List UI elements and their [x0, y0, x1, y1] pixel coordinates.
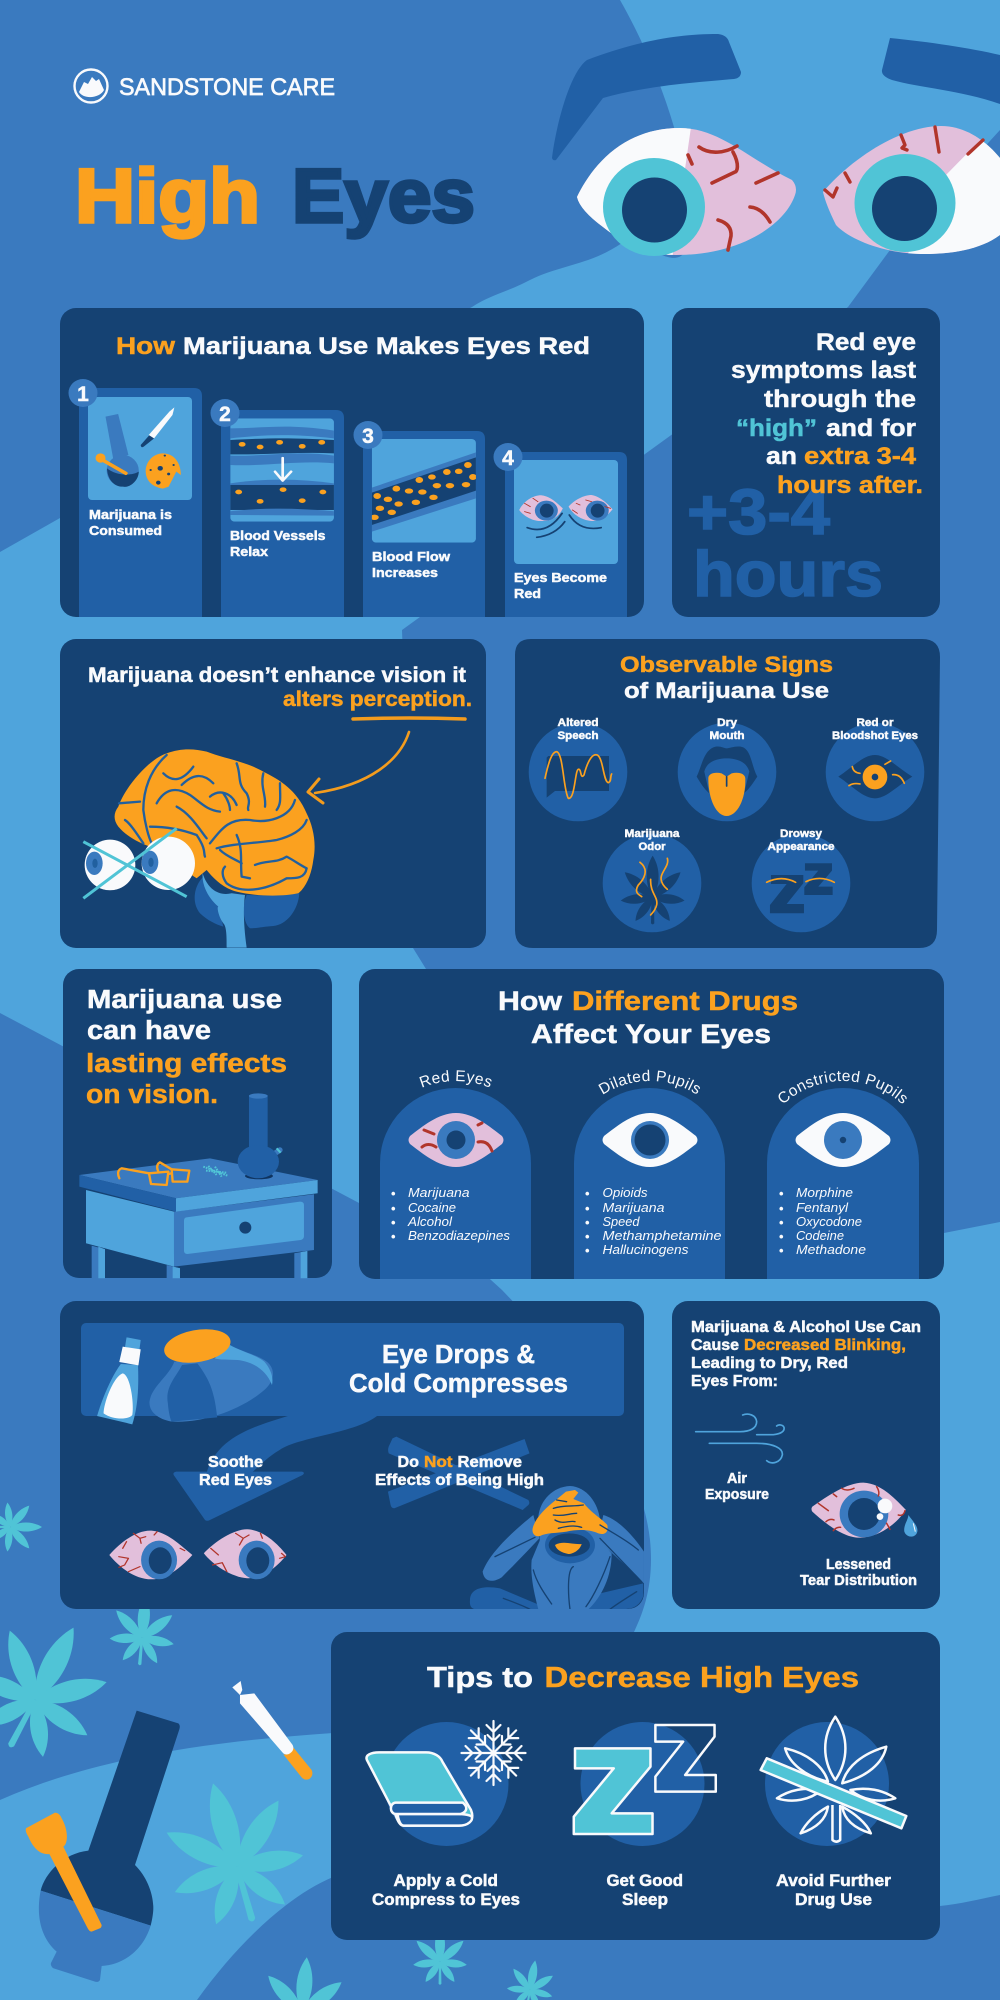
sign: bloodshot eyes: Bloodshot Eyes	[832, 730, 918, 742]
icon: X shape	[388, 1437, 530, 1510]
heading: Cold Compresses	[349, 1370, 568, 1398]
heading: Observable Signs	[620, 652, 833, 677]
text block: on vision.	[86, 1081, 218, 1109]
label: soothe	[199, 1454, 272, 1489]
icon: left eyebrow	[552, 34, 741, 160]
watermark: +3-4 hours: +3-4	[687, 476, 830, 548]
icon: left red eye	[577, 128, 796, 256]
heading	[349, 1341, 568, 1398]
text block: an	[766, 443, 797, 470]
panel: how different drugs affect your eyes	[359, 969, 944, 1279]
column: red eyes: •	[391, 1215, 396, 1230]
heading: Decrease High Eyes	[544, 1662, 859, 1694]
text block: hours after.	[777, 472, 923, 499]
panel: how marijuana use makes eyes red	[60, 308, 644, 617]
step 3 card: Blood Flow	[372, 549, 451, 564]
heading: Marijuana doesn’t enhance vision it	[88, 664, 466, 687]
icon: eye drops bottle	[97, 1337, 141, 1424]
text block: extra 3-4	[804, 443, 916, 470]
label: soothe: Soothe	[208, 1454, 263, 1471]
heading: Marijuana Use Makes Eyes Red	[183, 333, 590, 360]
panel: alters perception	[60, 639, 486, 948]
column: dilated pupils: •	[585, 1201, 590, 1216]
icon: constricted eye	[796, 1113, 890, 1167]
panel: eye drops and cold compresses	[60, 1301, 644, 1609]
text block	[731, 329, 923, 499]
column: dilated pupils: •	[585, 1186, 590, 1201]
icon: dilated eye	[602, 1113, 698, 1167]
sign: altered speech: Altered	[558, 717, 598, 729]
logo: Sandstone Care: SANDSTONE CARE	[119, 74, 335, 101]
step 4 card: Eyes Become	[514, 570, 607, 585]
column: constricted pupils	[767, 1071, 919, 1279]
label: do not remove	[375, 1454, 544, 1489]
label: avoid further drug use	[776, 1872, 892, 1909]
step 1 card	[68, 379, 202, 617]
text block	[86, 986, 287, 1109]
sign: bloodshot eyes: Red or	[856, 717, 894, 729]
column: red eyes: Alcohol	[407, 1214, 453, 1229]
column: red eyes: Cocaine	[408, 1200, 456, 1215]
illustration: brain and crossed eyes	[83, 749, 315, 948]
tip: avoid further drug use	[761, 1717, 906, 1846]
column: dilated pupils: Methamphetamine	[602, 1228, 722, 1243]
label: air exposure: Exposure	[705, 1486, 769, 1503]
column: red eyes	[380, 1070, 531, 1279]
panel: lasting effects on vision	[63, 969, 332, 1278]
step 4 card: Red	[514, 586, 541, 601]
watermark: +3-4 hours	[687, 476, 883, 610]
text block: can have	[87, 1017, 211, 1045]
label: avoid further drug use: Drug Use	[795, 1891, 872, 1909]
heading: Different Drugs	[572, 986, 798, 1016]
heading: of Marijuana Use	[624, 678, 829, 703]
column: constricted pupils: Oxycodone	[796, 1214, 862, 1229]
heading: alters perception.	[283, 688, 472, 711]
column: red eyes: •	[391, 1229, 396, 1244]
column: constricted pupils: Methadone	[796, 1242, 866, 1257]
step 3 card: Increases	[372, 565, 438, 580]
text block: “high”	[736, 415, 817, 442]
heading: Tips to	[427, 1662, 533, 1694]
column: dilated pupils: •	[585, 1229, 590, 1244]
step 4 badge: 4	[502, 447, 514, 470]
column: dilated pupils: Hallucinogens	[602, 1242, 689, 1257]
label: do not remove: Remove	[458, 1454, 522, 1471]
label: good sleep: Get Good	[606, 1872, 683, 1890]
tip: cold compress	[367, 1722, 508, 1846]
label: do not remove: Do	[398, 1454, 419, 1471]
text block: lasting effects	[86, 1050, 287, 1078]
text block: through the	[764, 386, 916, 413]
illustration: bong	[26, 1711, 180, 1982]
step 2 card: Relax	[230, 544, 269, 559]
heading: How	[116, 333, 176, 360]
step 3 badge: 3	[362, 425, 374, 448]
label: lessened tear distribution: Lessened	[826, 1556, 891, 1573]
arc label: Red Eyes	[419, 1070, 492, 1088]
heading	[620, 652, 833, 703]
illustration: nightstand with glasses and bong	[79, 1093, 318, 1278]
tip: good sleep	[574, 1722, 716, 1846]
text block: Decreased Blinking,	[744, 1337, 906, 1354]
panel: decreased blinking	[672, 1301, 940, 1609]
step 1 card: Marijuana is	[89, 507, 172, 522]
label: cold compress: Compress to Eyes	[372, 1891, 520, 1909]
step 2 badge: 2	[219, 403, 231, 426]
sign: drowsy appearance: Drowsy	[780, 828, 823, 840]
text block: symptoms last	[731, 357, 916, 384]
column: constricted pupils: •	[779, 1215, 784, 1230]
column: red eyes: Benzodiazepines	[408, 1228, 511, 1243]
banner with arrow	[81, 1323, 624, 1521]
logo: Sandstone Care	[74, 70, 335, 102]
icon: soothed red eyes	[109, 1529, 287, 1579]
sign: dry mouth: Mouth	[710, 730, 745, 742]
column: dilated pupils: Marijuana	[602, 1200, 664, 1215]
icon: ice pack	[149, 1324, 273, 1422]
text block: Cause	[691, 1337, 739, 1354]
step 3 card	[354, 421, 485, 617]
step 4 badge	[494, 443, 522, 471]
label: avoid further drug use: Avoid Further	[776, 1872, 892, 1890]
panel: tips to decrease high eyes	[331, 1632, 940, 1940]
column: dilated pupils: Speed	[602, 1214, 640, 1229]
column: dilated pupils: •	[585, 1243, 590, 1258]
label: soothe: Red Eyes	[199, 1472, 272, 1489]
panel: red eye duration	[672, 308, 940, 617]
icon: wind	[696, 1414, 784, 1463]
sign: drowsy appearance: Appearance	[768, 841, 834, 853]
label: do not remove: Not	[424, 1454, 452, 1471]
panel: observable signs	[515, 639, 940, 948]
column: constricted pupils: •	[779, 1186, 784, 1201]
step 2 card: Blood Vessels	[230, 528, 326, 543]
text block: Marijuana use	[87, 986, 282, 1014]
sign: altered speech: Speech	[558, 730, 599, 742]
heading	[88, 664, 472, 711]
step 4 card	[494, 443, 627, 617]
step 2 badge	[210, 399, 240, 427]
heading	[427, 1662, 859, 1694]
sign: altered speech	[529, 717, 627, 821]
label: cold compress	[372, 1872, 520, 1909]
column: constricted pupils: •	[779, 1243, 784, 1258]
label: good sleep	[606, 1872, 683, 1909]
label: good sleep: Sleep	[622, 1891, 668, 1909]
column: dilated pupils: •	[585, 1215, 590, 1230]
sign: dry mouth: Dry	[717, 717, 738, 729]
sign: drowsy appearance	[752, 828, 850, 932]
arc label: Constricted Pupils	[778, 1071, 907, 1104]
text block: and for	[826, 415, 916, 442]
underline and arrow	[308, 718, 465, 803]
sign: marijuana odor	[603, 828, 701, 932]
icon: snowflake	[462, 1721, 526, 1785]
column: constricted pupils: •	[779, 1229, 784, 1244]
step 1 badge: 1	[77, 383, 89, 406]
step 3 badge	[354, 421, 382, 449]
label: lessened tear distribution	[800, 1556, 917, 1589]
step 2 card	[210, 399, 344, 617]
icon: right red eye	[823, 125, 1000, 260]
column: constricted pupils: •	[779, 1201, 784, 1216]
sign: dry mouth	[678, 717, 776, 821]
icon: red eye	[408, 1113, 504, 1167]
label: air exposure	[705, 1470, 769, 1503]
title	[75, 154, 475, 239]
illustration: joint	[232, 1681, 312, 1780]
step 1 card: Consumed	[89, 523, 162, 538]
text block: Eyes From:	[691, 1373, 778, 1390]
icon: tearing red eye	[811, 1483, 917, 1538]
label: cold compress: Apply a Cold	[394, 1872, 498, 1890]
heading	[498, 986, 798, 1049]
column: constricted pupils: Fentanyl	[796, 1200, 849, 1215]
text block: Marijuana & Alcohol Use Can	[691, 1319, 921, 1336]
watermark: +3-4 hours: hours	[693, 538, 883, 610]
heading: How	[498, 986, 563, 1016]
column: dilated pupils	[574, 1070, 725, 1279]
column: red eyes: Marijuana	[408, 1185, 470, 1200]
sign: marijuana odor: Odor	[638, 841, 666, 853]
column: constricted pupils: Morphine	[796, 1185, 853, 1200]
heading: Eye Drops &	[382, 1341, 535, 1369]
step 1 badge	[68, 379, 98, 407]
column: red eyes: •	[391, 1186, 396, 1201]
text block: Red eye	[816, 329, 916, 356]
column: red eyes: •	[391, 1201, 396, 1216]
text block: Leading to Dry, Red	[691, 1355, 848, 1372]
text block	[691, 1319, 921, 1390]
arc label: Dilated Pupils	[598, 1070, 700, 1094]
sign: marijuana odor: Marijuana	[624, 828, 680, 840]
icon: right eyebrow	[882, 38, 1000, 104]
sign: bloodshot eyes	[826, 717, 924, 821]
title: High	[75, 154, 260, 239]
label: lessened tear distribution: Tear Distribution	[800, 1572, 917, 1589]
column: dilated pupils: Opioids	[602, 1185, 648, 1200]
title: Eyes	[292, 154, 475, 239]
label: do not remove: Effects of Being High	[375, 1472, 544, 1489]
label: air exposure: Air	[727, 1470, 747, 1487]
heading: Affect Your Eyes	[531, 1019, 771, 1049]
illustration: person covering eyes	[470, 1486, 644, 1609]
column: constricted pupils: Codeine	[796, 1228, 844, 1243]
